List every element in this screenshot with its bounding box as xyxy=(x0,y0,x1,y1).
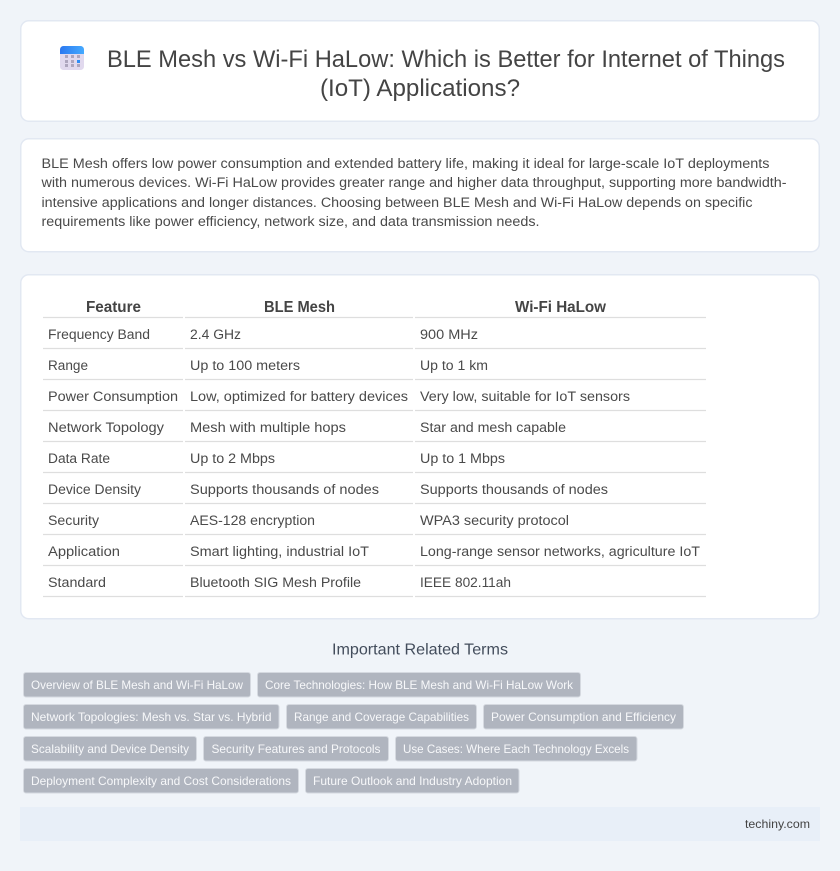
tag: Future Outlook and Industry Adoption xyxy=(313,774,512,788)
row: Range: Up to 1 km xyxy=(420,358,488,374)
row: Range xyxy=(48,358,488,374)
panel: summary text: BLE Mesh offers low power consumption and extended battery life, making it ideal for large-scale IoT deployments xyxy=(42,156,770,172)
tag: Scalability and Device Density xyxy=(31,742,189,756)
title: BLE Mesh vs Wi-Fi HaLow: Which is Better for Internet of Things xyxy=(107,46,785,73)
row: Standard: Standard xyxy=(48,575,106,591)
tag: Power Consumption and Efficiency xyxy=(491,710,676,724)
tag xyxy=(396,736,637,761)
row: Network Topology: Network Topology xyxy=(48,420,165,436)
row: Security: WPA3 security protocol xyxy=(420,513,569,529)
tag: Security Features and Protocols xyxy=(212,742,380,756)
panel: comparison table xyxy=(21,275,819,619)
row: Frequency Band: Frequency Band xyxy=(48,327,150,343)
title xyxy=(107,46,785,102)
row: Device Density: Supports thousands of nodes xyxy=(190,482,379,498)
row: Application: Long-range sensor networks, agriculture IoT xyxy=(420,544,700,560)
tag xyxy=(24,672,250,697)
row: Frequency Band xyxy=(48,327,478,343)
tag: Deployment Complexity and Cost Considerations xyxy=(31,774,291,788)
row: Standard: IEEE 802.11ah xyxy=(420,575,511,591)
tag: Network Topologies: Mesh vs. Star vs. Hybrid xyxy=(31,710,272,724)
related term tags xyxy=(24,672,684,793)
row: Power Consumption: Power Consumption xyxy=(48,389,178,405)
row: Security xyxy=(48,513,569,529)
row: Data Rate: Up to 2 Mbps xyxy=(190,451,275,467)
tag: Range and Coverage Capabilities xyxy=(294,710,469,724)
tag xyxy=(24,736,196,761)
row: Range: Range xyxy=(48,358,88,374)
footer: techiny.com xyxy=(745,817,810,831)
tag xyxy=(258,672,580,697)
table header row: BLE Mesh xyxy=(264,299,335,316)
row: Data Rate: Up to 1 Mbps xyxy=(420,451,505,467)
table header row: Feature xyxy=(86,299,141,316)
panel: summary text: requirements like power efficiency, network size, and data transmission needs. xyxy=(42,214,540,230)
row: Application: Smart lighting, industrial IoT xyxy=(190,544,369,560)
tag xyxy=(24,704,279,729)
row: Device Density xyxy=(48,482,608,498)
tag: Core Technologies: How BLE Mesh and Wi-Fi HaLow Work xyxy=(265,678,574,692)
footer xyxy=(20,807,820,841)
row: Standard xyxy=(48,575,511,591)
tag xyxy=(24,768,298,793)
row: Standard: Bluetooth SIG Mesh Profile xyxy=(190,575,361,591)
row: Frequency Band: 2.4 GHz xyxy=(190,327,241,343)
tag xyxy=(306,768,519,793)
table header row: Wi-Fi HaLow xyxy=(515,299,606,316)
tag xyxy=(204,736,388,761)
row: Device Density: Supports thousands of nodes xyxy=(420,482,608,498)
tag: Overview of BLE Mesh and Wi-Fi HaLow xyxy=(31,678,243,692)
tag xyxy=(484,704,684,729)
title: (IoT) Applications? xyxy=(320,75,520,102)
tag xyxy=(286,704,476,729)
panel: header xyxy=(21,21,819,121)
row: Range: Up to 100 meters xyxy=(190,358,300,374)
row: Data Rate xyxy=(48,451,505,467)
row: Device Density: Device Density xyxy=(48,482,142,498)
row: Network Topology: Mesh with multiple hops xyxy=(190,420,346,436)
row: Security: AES-128 encryption xyxy=(190,513,315,529)
row: Security: Security xyxy=(48,513,100,529)
table header row xyxy=(86,299,606,316)
row: Power Consumption: Low, optimized for battery devices xyxy=(190,389,408,405)
icon: calendar grid xyxy=(60,46,84,70)
tag: Use Cases: Where Each Technology Excels xyxy=(403,742,629,756)
row: Network Topology xyxy=(48,420,566,436)
heading: related terms: Important Related Terms xyxy=(332,642,508,658)
row: Power Consumption: Very low, suitable for IoT sensors xyxy=(420,389,630,405)
row: Application: Application xyxy=(48,544,120,560)
row: Frequency Band: 900 MHz xyxy=(420,327,478,343)
row: Application xyxy=(48,544,700,560)
panel: summary text xyxy=(21,139,819,252)
panel: summary text: intensive applications and longer distances. Choosing between BLE Mesh and Wi-Fi HaLow depends on specific xyxy=(42,195,753,211)
row: Data Rate: Data Rate xyxy=(48,451,110,467)
panel: summary text: with numerous devices. Wi-Fi HaLow provides greater range and higher data throughput, supporting more bandwidth- xyxy=(40,175,787,191)
row: Power Consumption xyxy=(48,389,630,405)
row: Network Topology: Star and mesh capable xyxy=(420,420,566,436)
